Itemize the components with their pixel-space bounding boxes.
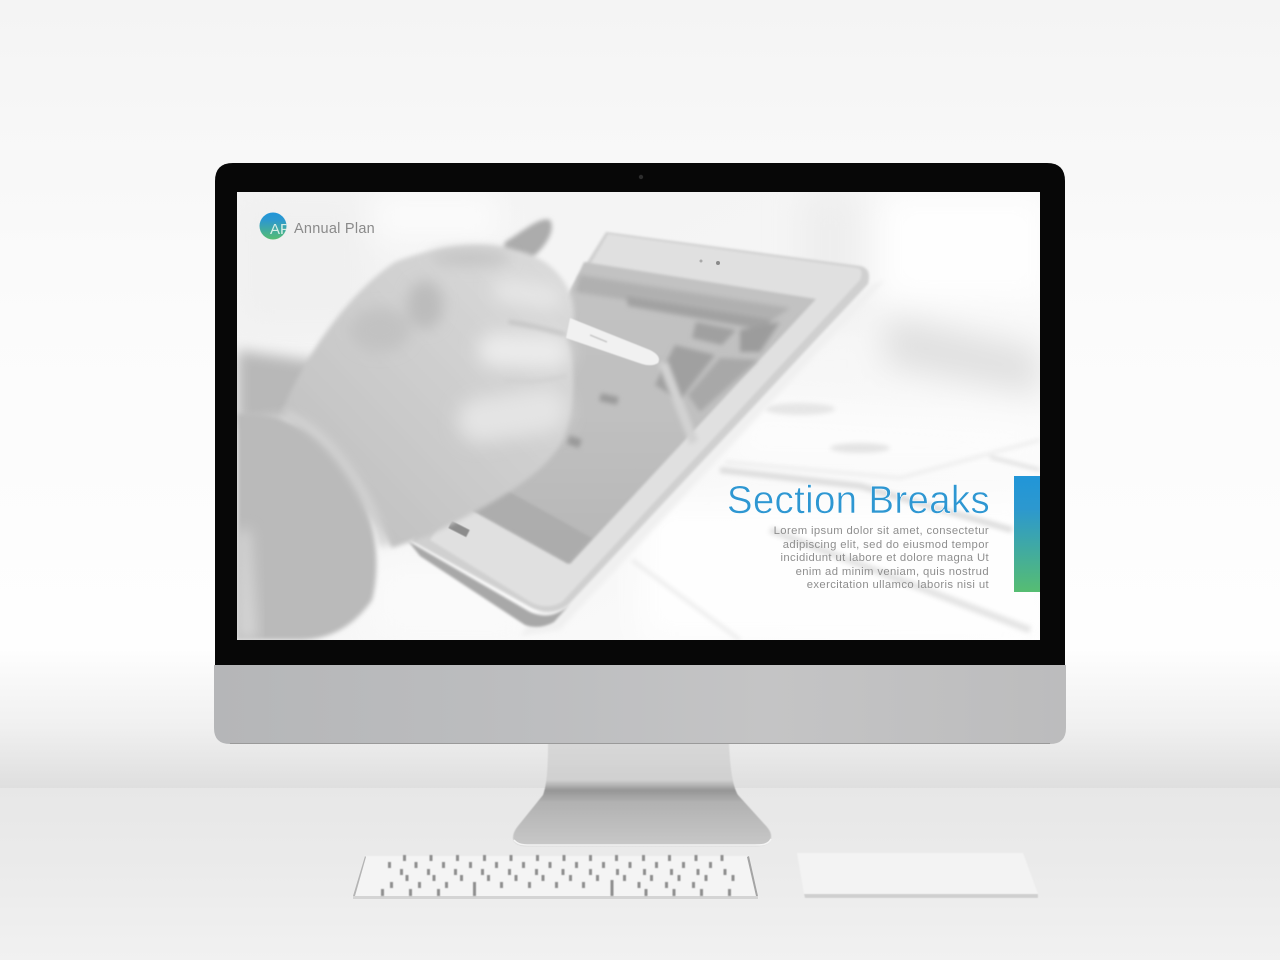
tablet display <box>472 262 816 564</box>
section title: Section Breaks <box>727 479 990 522</box>
monitor chin <box>214 665 1066 744</box>
logo badge <box>260 212 286 240</box>
knuckle shading <box>358 245 502 346</box>
tablet <box>408 232 885 636</box>
arm edge light <box>237 530 258 640</box>
tablet halo <box>527 392 774 632</box>
keyboard <box>353 855 758 899</box>
monitor body <box>214 163 1066 744</box>
gradient accent bar <box>1014 476 1040 592</box>
finger creases <box>510 320 565 336</box>
monitor bezel <box>215 163 1065 665</box>
tablet shell <box>412 232 869 612</box>
tablet model mark <box>448 521 470 537</box>
background: desk <box>0 788 1280 960</box>
body text <box>774 525 989 591</box>
pointing finger <box>502 217 554 258</box>
blurred desk papers <box>632 403 1040 640</box>
keyboard key gaps <box>381 855 734 896</box>
webcam <box>639 175 643 179</box>
trackpad <box>797 853 1038 898</box>
monitor stand <box>513 743 771 846</box>
photo background <box>237 192 1040 640</box>
slide screen <box>237 192 1050 640</box>
logo badge: AP <box>270 221 290 238</box>
keyboard body <box>353 856 758 899</box>
background arm shadow <box>237 350 320 425</box>
body text: incididunt ut labore et dolore magna Ut <box>781 552 989 564</box>
body text: adipiscing elit, sed do eiusmod tempor <box>783 539 989 551</box>
body text: exercitation ullamco laboris nisi ut <box>807 579 989 591</box>
tablet camera <box>700 260 702 262</box>
brand name: Annual Plan <box>294 221 375 237</box>
tablet underside <box>408 541 570 627</box>
body text: Lorem ipsum dolor sit amet, consectetur <box>774 525 989 537</box>
forearm <box>237 414 376 640</box>
tablet display content <box>567 275 790 448</box>
body text: enim ad minim veniam, quis nostrud <box>796 566 989 578</box>
finger highlights <box>480 290 552 420</box>
hand <box>237 219 574 640</box>
wrist cuff <box>285 414 385 546</box>
stylus <box>566 318 659 365</box>
fist <box>282 245 574 548</box>
stylus reflection <box>658 362 698 445</box>
